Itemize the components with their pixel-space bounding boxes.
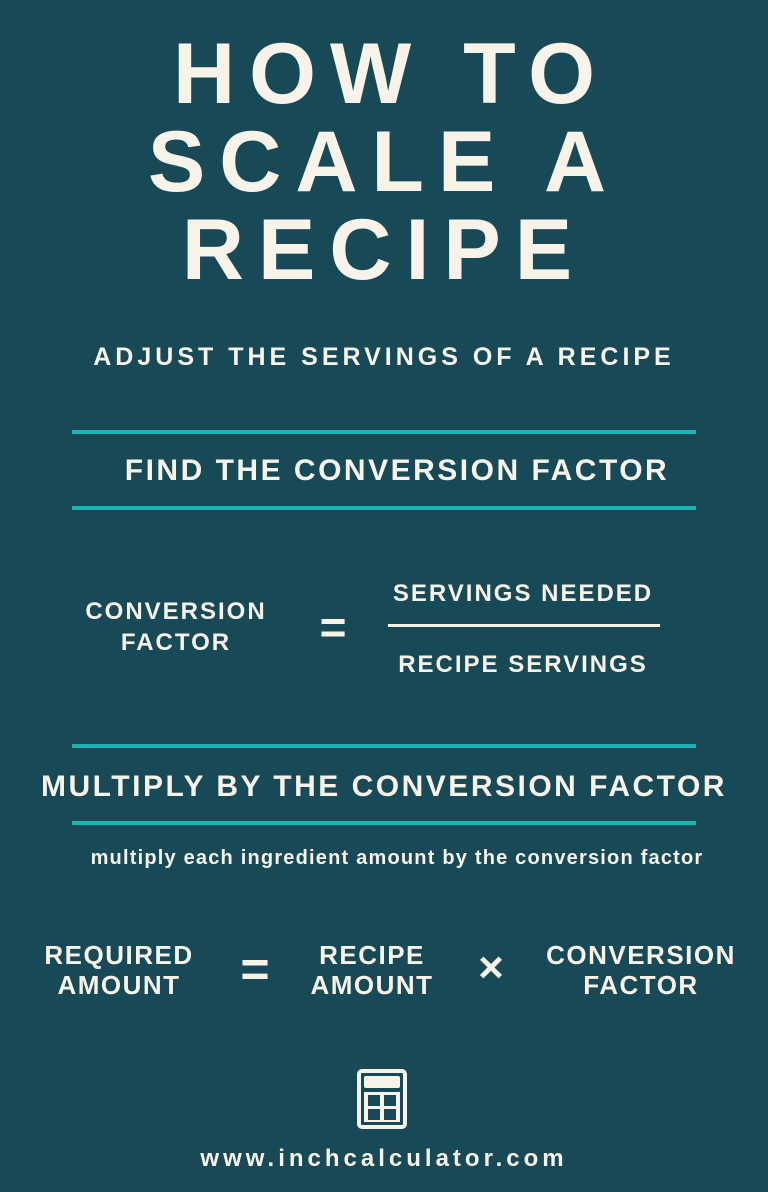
equals sign: =: [240, 941, 270, 997]
denominator: RECIPE SERVINGS: [398, 651, 648, 678]
multiply sign: ×: [478, 943, 504, 992]
heading: find the conversion factor: FIND THE CONVERSION FACTOR: [125, 454, 669, 487]
heading: multiply by the conversion factor: MULTIPLY BY THE CONVERSION FACTOR: [41, 770, 727, 803]
label: conversion factor: [85, 598, 267, 656]
label: conversion factor: FACTOR: [583, 970, 699, 1000]
label: recipe amount: AMOUNT: [310, 970, 434, 1000]
instruction text: multiply each ingredient amount by the conversion factor: [91, 847, 703, 869]
numerator: SERVINGS NEEDED: [393, 580, 653, 607]
formula: conversion factor: [85, 580, 660, 678]
subtitle: ADJUST THE SERVINGS OF A RECIPE: [93, 343, 675, 371]
label: conversion factor: CONVERSION: [546, 940, 736, 970]
label: conversion factor: CONVERSION: [85, 598, 267, 625]
label: required amount: REQUIRED: [44, 940, 194, 970]
title: [148, 26, 620, 298]
label: recipe amount: RECIPE: [319, 940, 425, 970]
label: conversion factor: FACTOR: [121, 629, 231, 656]
label: required amount: [44, 940, 194, 1000]
label: recipe amount: [310, 940, 434, 1000]
formula: required amount: [44, 940, 736, 1000]
title: HOW TO: [173, 26, 609, 122]
label: required amount: AMOUNT: [57, 970, 181, 1000]
label: conversion factor: [546, 940, 736, 1000]
equals sign: =: [320, 601, 346, 653]
icon: calculator: [357, 1069, 407, 1129]
title: SCALE A: [148, 114, 620, 210]
title: RECIPE: [182, 202, 586, 298]
footer url: www.inchcalculator.com: [200, 1145, 568, 1172]
